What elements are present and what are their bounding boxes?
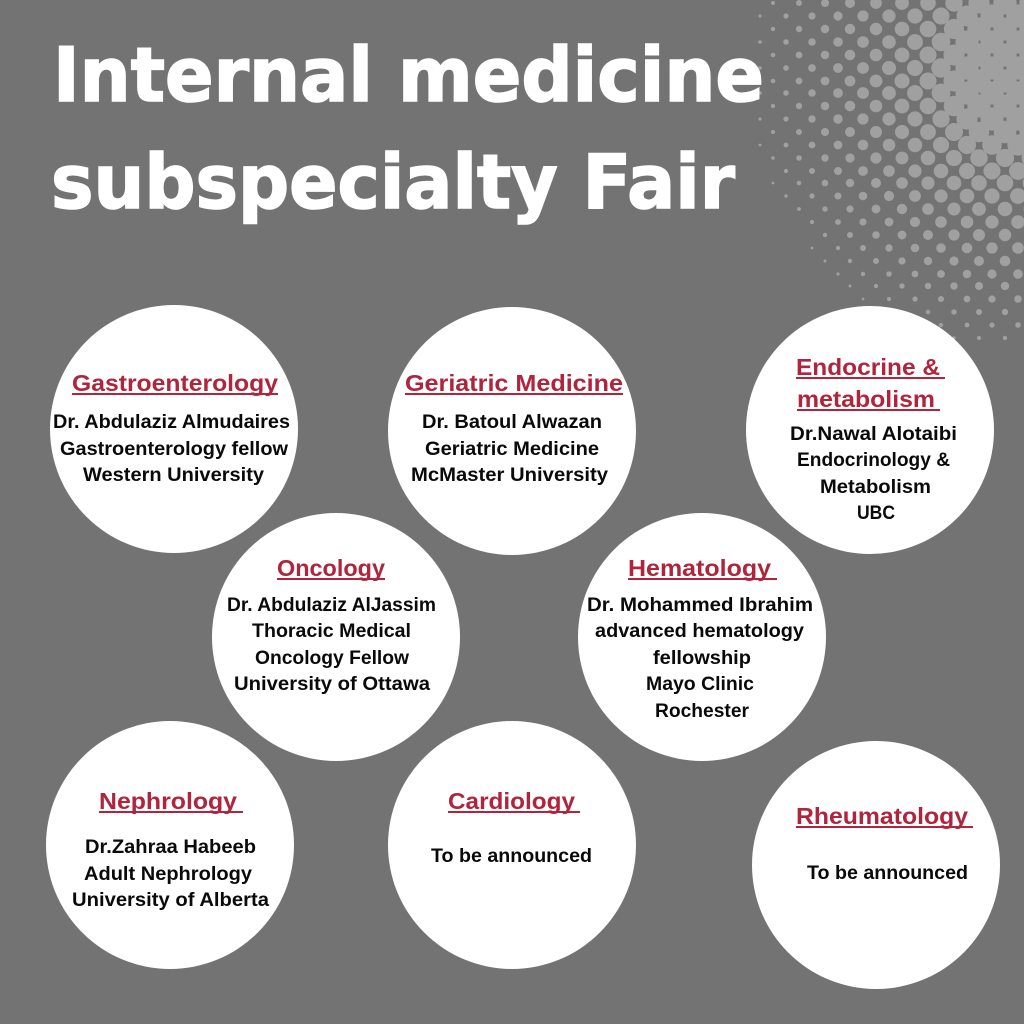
panel: geriatric medicine: Dr. Batoul Alwazan (422, 411, 602, 433)
panel: nephrology: Dr.Zahraa Habeeb (85, 836, 256, 858)
panel: endocrine and metabolism: UBC (857, 502, 895, 524)
panel: rheumatology: To be announced (807, 862, 968, 884)
panel: hematology: Dr. Mohammed Ibrahim (587, 594, 813, 616)
title: subspecialty Fair (51, 138, 735, 226)
panel: oncology (212, 513, 460, 761)
panel: endocrine and metabolism: Dr.Nawal Alotaibi (790, 423, 957, 445)
panel: gastroenterology (50, 305, 298, 553)
panel: nephrology: Adult Nephrology (84, 863, 252, 885)
panel: geriatric medicine: Geriatric Medicine (425, 438, 599, 460)
panel: oncology: University of Ottawa (234, 673, 430, 695)
panel: hematology (578, 513, 826, 761)
panel: endocrine and metabolism: Endocrinology & (797, 449, 950, 471)
panel: hematology: Mayo Clinic (646, 673, 754, 695)
title (51, 31, 764, 226)
panel: endocrine and metabolism: metabolism (797, 386, 935, 412)
panel: nephrology: Nephrology (99, 788, 237, 814)
panel: hematology: Rochester (655, 700, 749, 722)
panel: endocrine and metabolism: Endocrine & (796, 354, 940, 380)
panel: endocrine and metabolism (746, 306, 994, 554)
panel: hematology: fellowship (653, 647, 751, 669)
panel: cardiology: Cardiology (448, 788, 575, 814)
panel: gastroenterology: Gastroenterology fellow (60, 438, 289, 460)
panel: oncology: Oncology (277, 555, 385, 581)
panel: geriatric medicine (388, 307, 636, 555)
panel: rheumatology (752, 741, 1000, 989)
panel: oncology: Thoracic Medical (252, 620, 411, 642)
panel: gastroenterology: Western University (83, 464, 264, 486)
panel: rheumatology: Rheumatology (796, 803, 968, 829)
panel: nephrology: University of Alberta (72, 889, 269, 911)
halftone dot pattern (758, 0, 1024, 340)
panel: oncology: Oncology Fellow (255, 647, 410, 669)
panel: geriatric medicine: McMaster University (411, 464, 608, 486)
panel: geriatric medicine: Geriatric Medicine (405, 370, 623, 396)
panel: gastroenterology: Dr. Abdulaziz Almudaires (53, 411, 290, 433)
panel: endocrine and metabolism: Metabolism (820, 476, 931, 498)
panel: hematology: Hematology (628, 555, 771, 581)
panel: nephrology (46, 721, 294, 969)
panel: cardiology: To be announced (431, 845, 592, 867)
panel: hematology: advanced hematology (595, 620, 804, 642)
title: Internal medicine (53, 31, 764, 119)
panel: oncology: Dr. Abdulaziz AlJassim (227, 594, 436, 616)
panel: gastroenterology: Gastroenterology (72, 370, 278, 396)
panel: cardiology (388, 721, 636, 969)
